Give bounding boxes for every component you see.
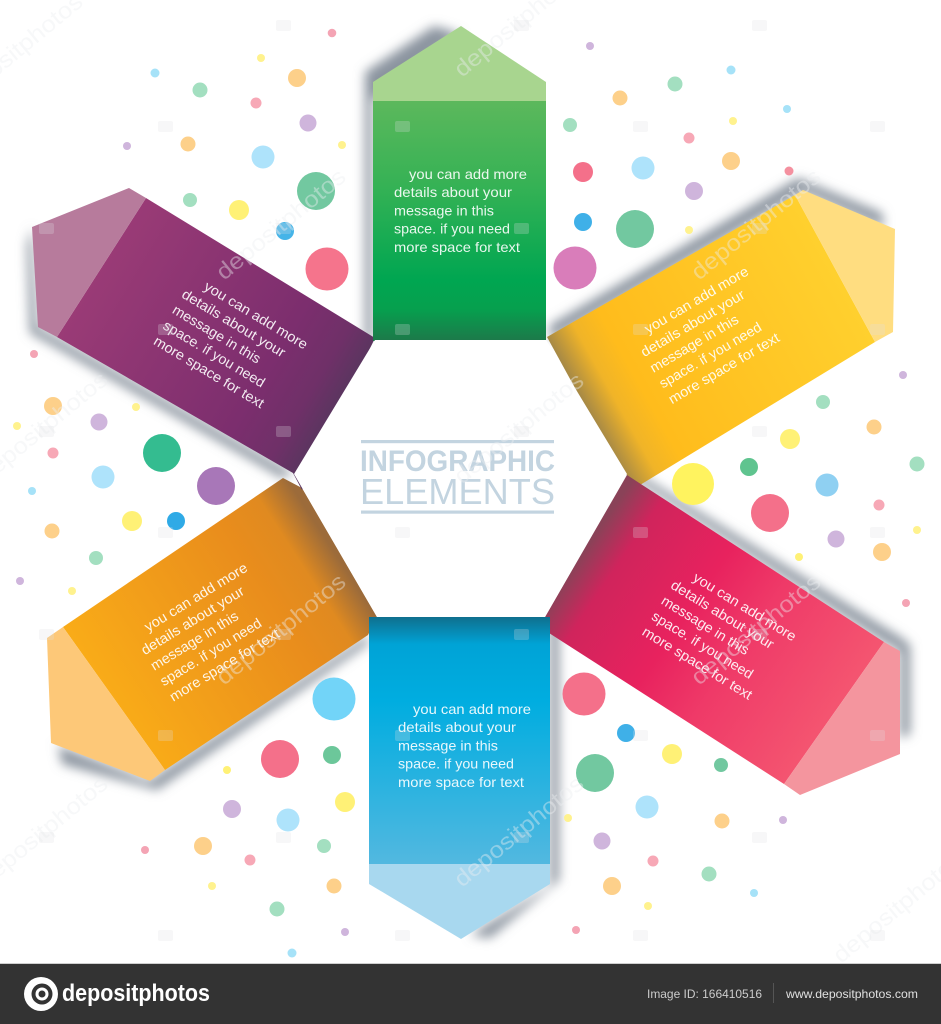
central hexagon [294,340,627,617]
panel: purple [32,188,375,490]
text: orange panel: space. if you need [157,615,264,689]
text: purple panel: you can add more [201,278,311,352]
text: yellow panel [628,263,788,407]
text: yellow panel: space. if you need [656,319,764,391]
title: ELEMENTS [360,471,555,512]
orange arrow tip [47,627,165,781]
text: pink panel: details about your [668,577,777,652]
text: green panel: space. if you need [394,221,510,237]
watermarks: depositphotos [686,568,826,690]
text: pink panel: space. if you need [649,608,756,682]
text: blue panel [398,701,531,790]
pink arrow tip [784,642,900,795]
icon: camera logo [24,977,58,1011]
watermarks: depositphotos [449,770,589,892]
text: green panel: you can add more [409,166,527,182]
text: purple panel [151,270,311,415]
title: INFOGRAPHIC [360,445,555,478]
watermarks: depositphotos [211,163,351,285]
panel: yellow [547,190,895,485]
text: yellow panel: more space for text [665,329,782,407]
logo wordmark: depositphotos [62,980,210,1007]
text: orange panel: you can add more [141,559,250,635]
title [360,440,555,514]
text: orange panel: details about your [138,582,247,658]
text: purple panel: message in this [170,301,264,367]
image id: Image ID: 166410516 [647,987,762,1001]
watermarks: depositphotos [686,163,826,285]
text: green panel: more space for text [394,239,520,255]
panel: blue [369,617,550,939]
text: blue panel: message in this [398,737,498,753]
text: orange panel: message in this [147,608,241,673]
text: purple panel: details about your [179,286,289,360]
text: blue panel: details about your [398,719,516,735]
yellow arrow tip [795,190,895,342]
text: blue panel: you can add more [413,701,531,717]
text: yellow panel: you can add more [641,263,751,337]
text: green panel: details about your [394,184,512,200]
panel: green [373,26,546,341]
text: green panel: message in this [394,202,494,218]
text: pink panel: you can add more [690,569,800,644]
text: green panel [394,166,527,255]
text: purple panel: space. if you need [160,317,268,390]
website: www.depositphotos.com [785,987,918,1001]
text: orange panel: more space for text [166,625,282,704]
text: blue panel: space. if you need [398,756,514,772]
text: purple panel: more space for text [151,333,267,411]
watermarks: depositphotos [211,568,351,690]
watermarks: depositphotos [449,367,589,489]
blue arrow tip [369,864,550,939]
text: yellow panel: details about your [638,286,748,360]
panel: orange [47,478,377,781]
purple arrow tip [32,188,146,337]
text: pink panel: more space for text [640,623,755,703]
footer bar [0,963,941,1024]
text: pink panel: message in this [659,592,752,658]
green arrow tip [373,26,546,101]
text: pink panel [640,561,800,706]
text: orange panel [128,559,288,704]
text: blue panel: more space for text [398,774,524,790]
text: yellow panel: message in this [647,311,741,376]
panel: pink [545,475,900,795]
